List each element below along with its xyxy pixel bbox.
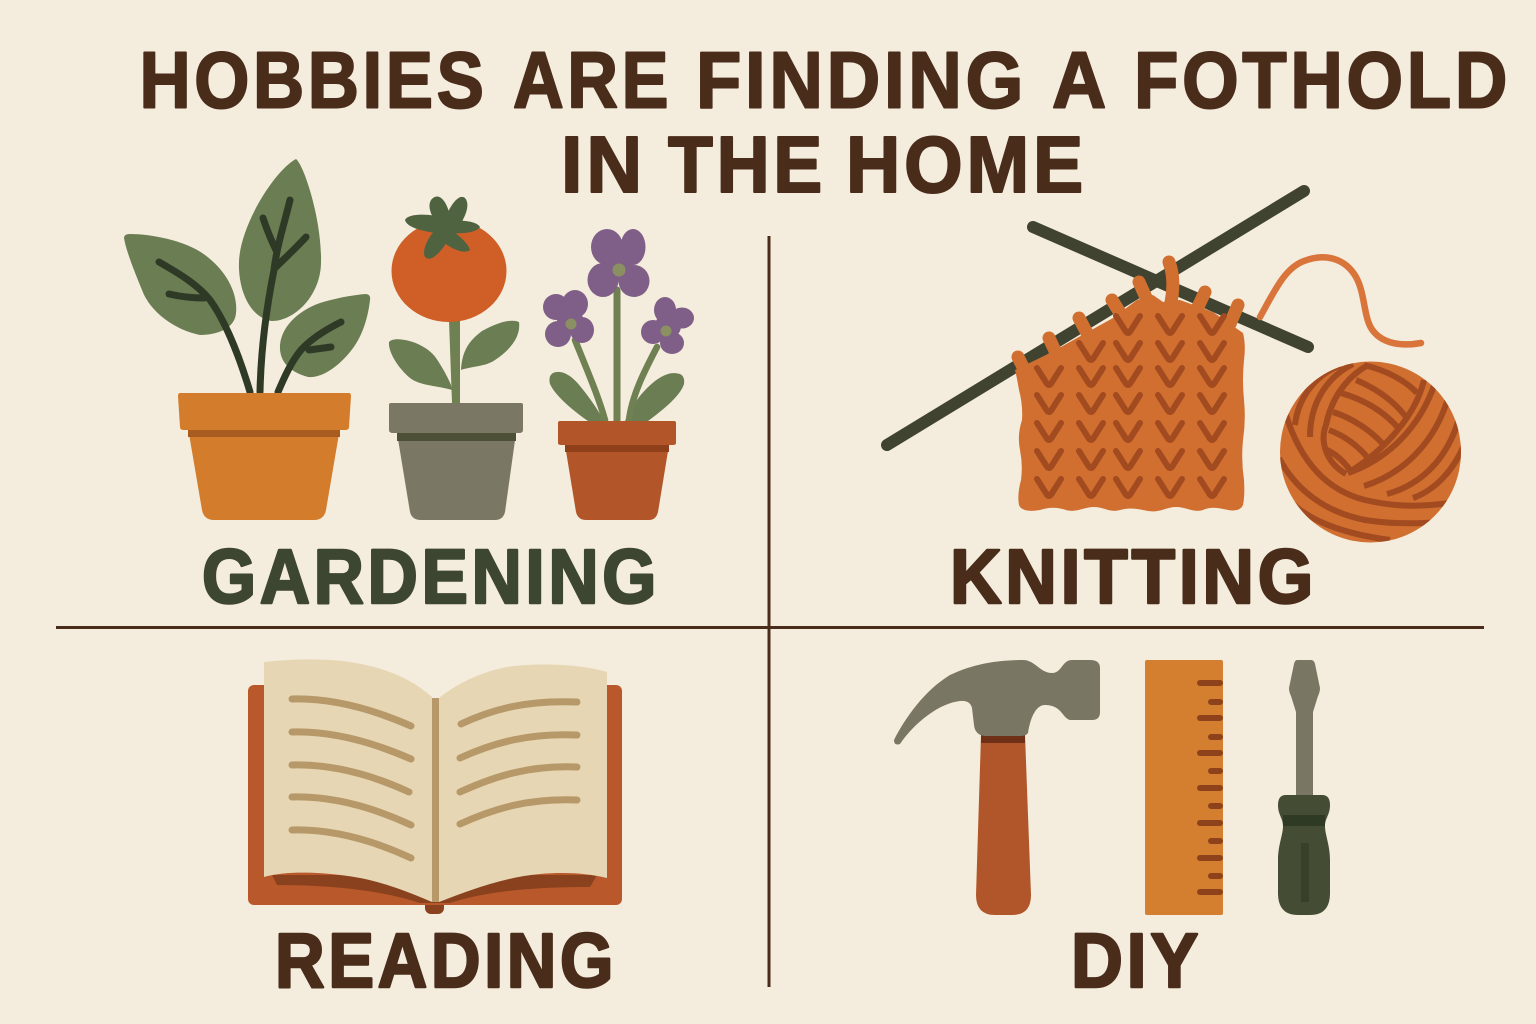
label: diy: DIY: [1071, 918, 1202, 1004]
title: A: [1052, 36, 1110, 124]
title: ARE: [513, 36, 672, 124]
icon: ruler: [1145, 660, 1223, 915]
panel: gardening: [124, 159, 694, 620]
title: IN: [561, 120, 646, 209]
title: FOTHOLD: [1134, 36, 1511, 124]
panel: knitting: [887, 191, 1466, 620]
label: reading: READING: [275, 918, 617, 1004]
label: gardening: GARDENING: [202, 534, 660, 620]
title: [140, 36, 1511, 209]
panel: diy: [894, 660, 1330, 1004]
icon: yarn strand: [1260, 257, 1421, 344]
icon: hammer: [894, 660, 1100, 915]
title: THE: [668, 120, 826, 209]
icon: screwdriver: [1278, 660, 1330, 915]
icon: knitting needles: [887, 191, 1308, 445]
icon: ball of yarn: [1279, 362, 1466, 542]
icon: purple flowers in terracotta pot: [543, 229, 694, 520]
panel: reading: [248, 659, 622, 1004]
icon: open book: [248, 659, 622, 914]
icon: knitted swatch: [1015, 262, 1245, 511]
icon: tomato plant in grey pot: [389, 197, 523, 520]
title: HOME: [846, 120, 1087, 209]
icon: leafy plant in orange pot: [124, 159, 370, 520]
title: HOBBIES: [140, 36, 488, 124]
title: FINDING: [696, 36, 1027, 124]
label: knitting: KNITTING: [950, 534, 1317, 620]
